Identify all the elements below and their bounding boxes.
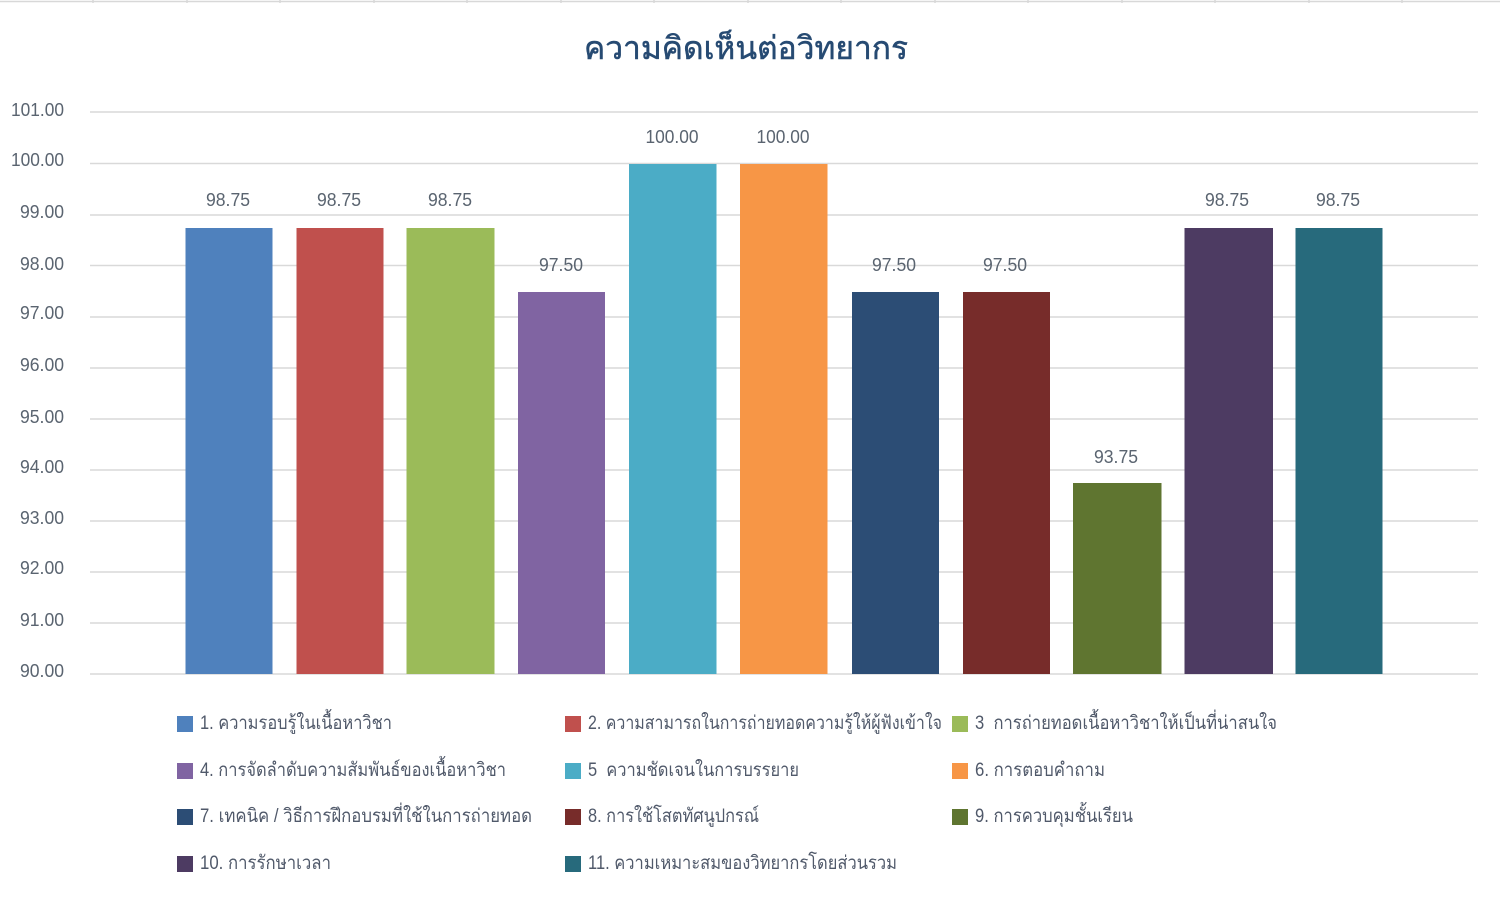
bar 5: 100.00 — [629, 127, 716, 674]
bar 8: 97.50: 97.50 — [983, 255, 1027, 275]
legend item 9: 9. การควบคุมชั้นเรียน — [975, 802, 1133, 828]
legend item 2: 2. ความสามารถในการถ่ายทอดความรู้ให้ผู้ฟังเข้าใจ — [588, 712, 942, 734]
bar 2: 98.75 — [296, 190, 384, 674]
y axis labels: 92.00 — [20, 558, 64, 578]
y axis labels: 98.00 — [20, 254, 64, 274]
bar 11: 98.75 — [1296, 190, 1382, 674]
bar 4: 97.50 — [518, 255, 605, 674]
y axis labels: 95.00 — [20, 407, 64, 427]
y axis labels: 96.00 — [20, 355, 64, 375]
legend item 3: 3 การถ่ายทอดเนื้อหาวิชาให้เป็นที่น่าสนใจ — [975, 709, 1277, 734]
legend item 10: 10. การรักษาเวลา — [200, 853, 331, 874]
y axis labels: 97.00 — [20, 303, 64, 323]
bar 3: 98.75: 98.75 — [428, 190, 472, 210]
bar 7: 97.50: 97.50 — [872, 255, 916, 275]
bar 10: 98.75 — [1184, 190, 1273, 674]
legend item 5: 5 ความชัดเจนในการบรรยาย — [588, 759, 799, 781]
legend item 6: 6. การตอบคำถาม — [975, 760, 1105, 781]
y axis labels: 93.00 — [20, 508, 64, 528]
bar 1: 98.75: 98.75 — [206, 190, 250, 210]
y axis labels: 99.00 — [20, 202, 64, 222]
y axis labels: 90.00 — [20, 661, 64, 681]
bar 1: 98.75 — [186, 190, 272, 674]
bar 3: 98.75 — [406, 190, 494, 674]
y axis labels: 101.00 — [11, 100, 64, 120]
bar 8: 97.50 — [963, 255, 1050, 674]
bar 11: 98.75: 98.75 — [1316, 190, 1360, 210]
legend item 4 — [177, 756, 506, 781]
title: ความคิดเห็นต่อวิทยากร — [584, 29, 908, 66]
bar 5: 100.00: 100.00 — [646, 127, 698, 147]
legend — [177, 709, 1277, 874]
legend item 1 — [177, 709, 392, 734]
y axis labels — [11, 100, 64, 681]
legend item 8: 8. การใช้โสตทัศนูปกรณ์ — [588, 804, 759, 827]
bar 7: 97.50 — [852, 255, 939, 674]
legend item 11: 11. ความเหมาะสมของวิทยากรโดยส่วนรวม — [588, 851, 897, 874]
bar 4: 97.50: 97.50 — [539, 255, 583, 275]
legend item 7: 7. เทคนิค / วิธีการฝึกอบรมที่ใช้ในการถ่ายทอด — [200, 802, 532, 827]
bar 10: 98.75: 98.75 — [1205, 190, 1249, 210]
bar 9: 93.75: 93.75 — [1094, 447, 1138, 467]
y axis labels: 91.00 — [20, 610, 64, 630]
legend item 9 — [952, 802, 1133, 828]
y axis labels: 100.00 — [11, 150, 64, 170]
bar 2: 98.75: 98.75 — [317, 190, 361, 210]
y axis labels: 94.00 — [20, 457, 64, 477]
bar 9: 93.75 — [1073, 447, 1162, 674]
legend item 1: 1. ความรอบรู้ในเนื้อหาวิชา — [200, 709, 392, 734]
bar 6: 100.00 — [740, 127, 828, 674]
bar 6: 100.00: 100.00 — [756, 127, 810, 147]
legend item 4: 4. การจัดลำดับความสัมพันธ์ของเนื้อหาวิชา — [200, 756, 506, 781]
